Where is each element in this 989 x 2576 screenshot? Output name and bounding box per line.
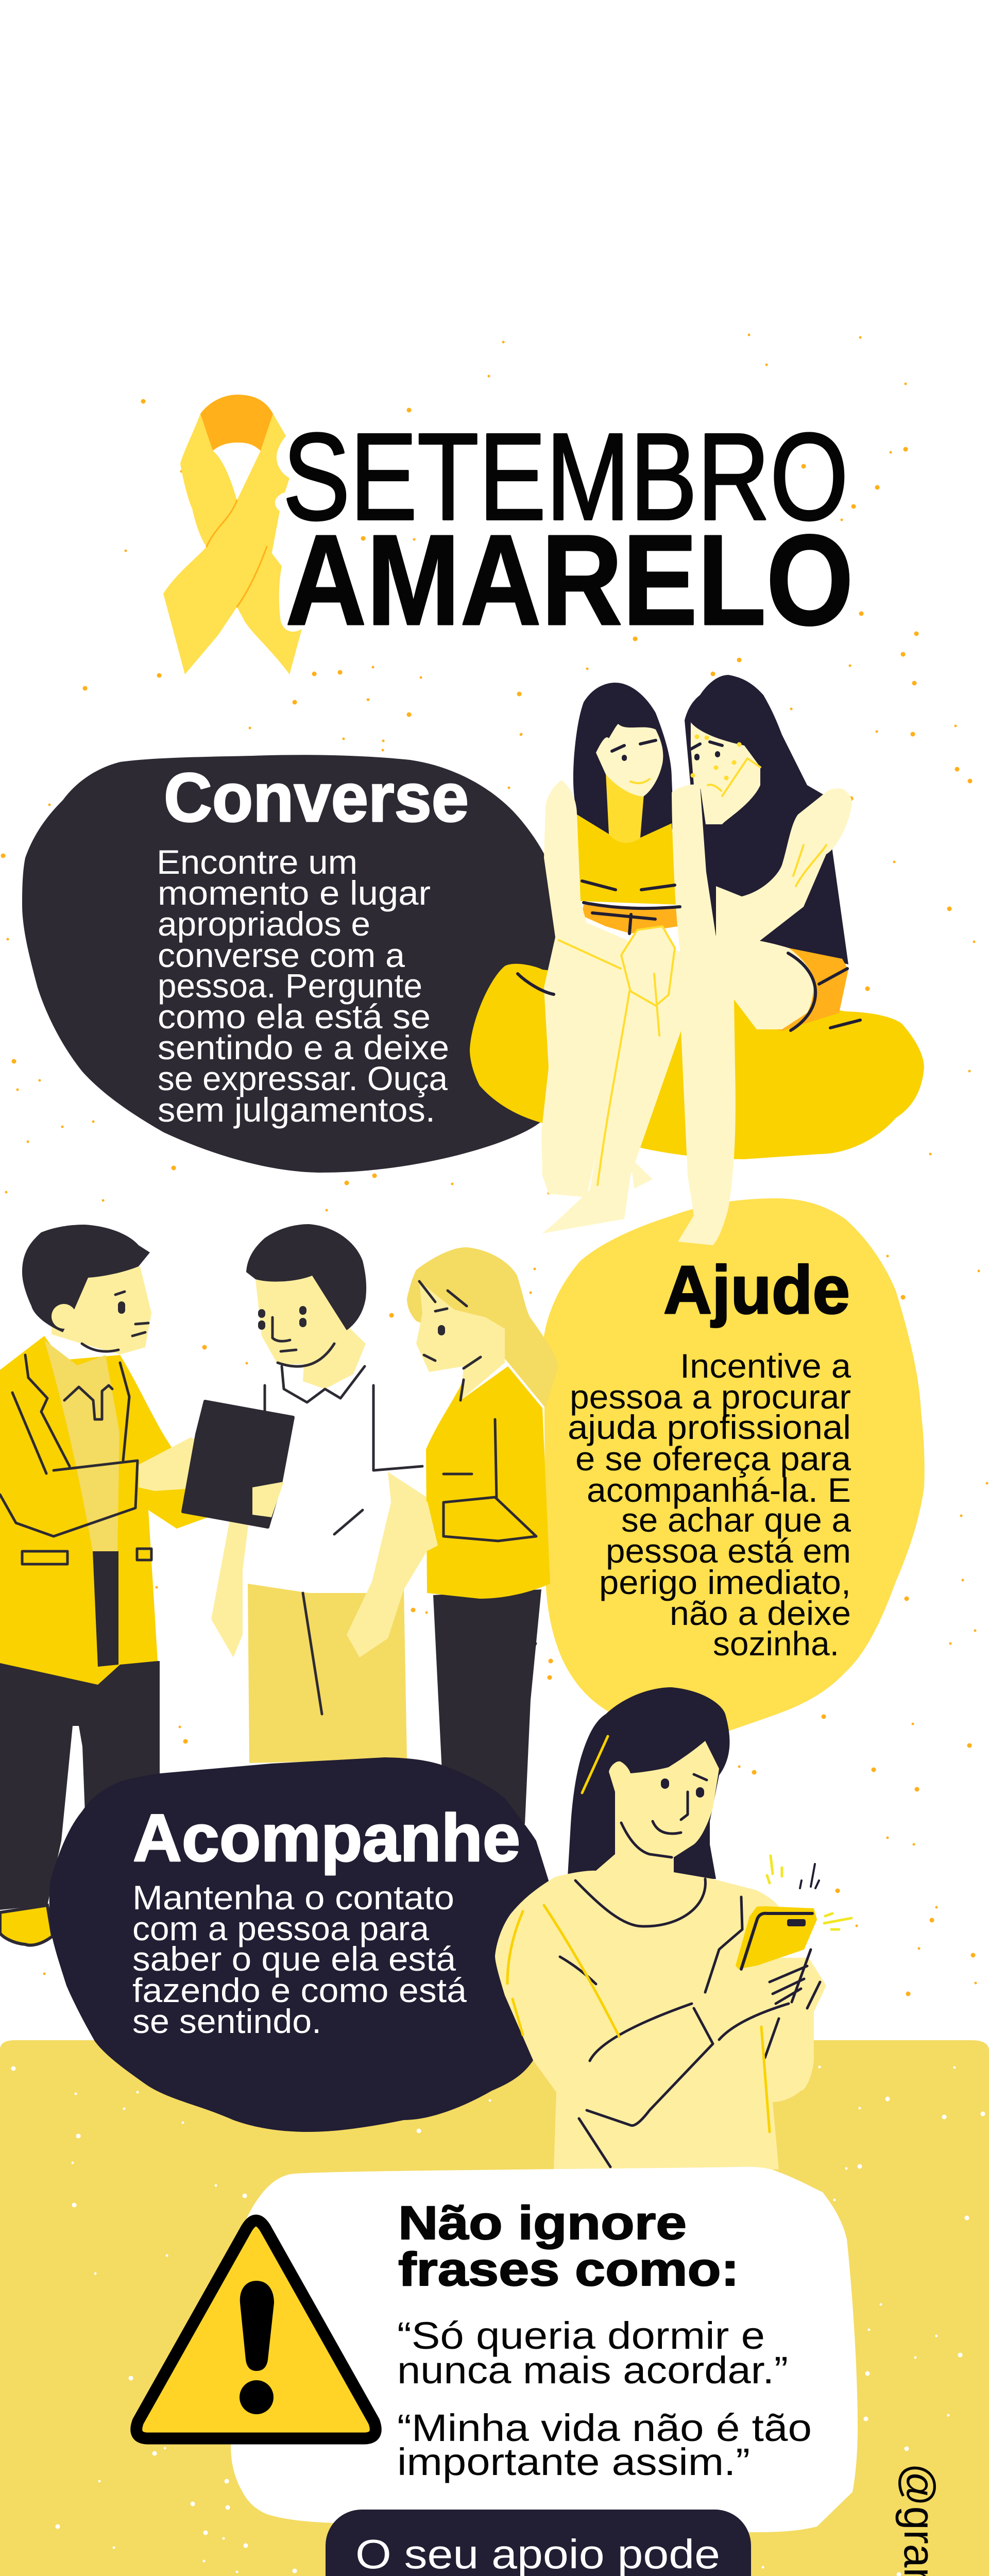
man one jacket	[0, 1336, 208, 1685]
text: converse body: Encontre um	[157, 843, 357, 881]
left woman legs	[541, 937, 681, 1233]
panel: converse	[22, 755, 561, 1173]
text: ajude body: e se ofereça para	[575, 1439, 851, 1478]
panel: warning box	[137, 2167, 858, 2532]
man two hair	[246, 1224, 366, 1330]
heading: warning	[398, 2197, 739, 2296]
text: converse body: pessoa. Pergunte	[158, 967, 422, 1005]
text: ajude body: Incentive a	[680, 1347, 851, 1385]
text: ajude body: sozinha.	[713, 1624, 839, 1663]
left woman neck	[606, 773, 644, 843]
man two face	[255, 1276, 366, 1389]
title: AMARELO	[285, 508, 854, 652]
white speckles on panel	[13, 2067, 983, 2576]
text: warning quotes: nunca mais acordar.”	[397, 2349, 788, 2392]
text: converse body	[157, 843, 449, 1129]
orange speckle background	[3, 335, 987, 1994]
text: warning quotes: “Só queria dormir e	[397, 2314, 765, 2357]
left woman top	[577, 815, 678, 905]
text: ajude body: não a deixe	[670, 1594, 851, 1632]
text: converse body: se expressar. Ouça	[158, 1059, 448, 1097]
right woman arms	[716, 788, 852, 943]
text: ajude body: acompanhá-la. E	[587, 1471, 851, 1509]
woman top	[426, 1366, 550, 1599]
body	[495, 1854, 826, 2170]
hand on tablet	[252, 1482, 284, 1517]
man one face	[52, 1266, 151, 1354]
tablet	[183, 1401, 293, 1527]
woman pants	[433, 1589, 541, 1824]
man one trousers	[0, 1661, 160, 1910]
heading: ajude: Ajude	[663, 1252, 850, 1328]
text: acompanhe body: com a pessoa para	[132, 1909, 429, 1947]
text: converse body: apropriados e	[158, 905, 370, 943]
title: SETEMBRO	[283, 408, 848, 546]
woman hair	[407, 1247, 558, 1408]
illustration: beanbag	[470, 964, 924, 1159]
man one hand	[139, 1437, 214, 1491]
man two trousers	[248, 1584, 407, 1763]
left woman hair	[573, 683, 674, 838]
man one trouser gap	[93, 1551, 118, 1667]
title	[283, 408, 854, 652]
left woman face	[596, 724, 663, 796]
heading: warning: Não ignore	[398, 2197, 687, 2249]
face	[596, 1741, 719, 1875]
left woman back foot	[630, 1158, 653, 1189]
outfit and face lines	[0, 1281, 536, 1714]
right woman leg	[678, 936, 814, 1245]
text: acompanhe body: fazendo e como está	[132, 1971, 467, 2009]
left woman hand	[621, 926, 675, 1006]
illustration: three people with tablet	[0, 1224, 558, 1945]
panel: acompanhe	[49, 1757, 556, 2132]
text: acompanhe body: saber o que ela está	[132, 1940, 456, 1978]
left woman shorts	[582, 905, 678, 934]
hand on arm	[391, 1495, 438, 1558]
text: converse body: sentindo e a deixe	[158, 1028, 449, 1066]
right woman hair	[685, 675, 848, 964]
heading: warning: frases como:	[398, 2243, 739, 2296]
man one shirt	[44, 1340, 120, 1551]
man one ear	[52, 1304, 76, 1329]
text: converse body: sem julgamentos.	[158, 1091, 435, 1129]
illustration: yellow blob ajude	[544, 1198, 925, 1752]
man two arms	[211, 1472, 429, 1657]
text: warning quotes: “Minha vida não é tão	[397, 2406, 812, 2449]
man one hair	[22, 1225, 150, 1332]
illustration: woman with phone	[495, 1687, 851, 2170]
text: warning quotes: importante assim.”	[397, 2441, 750, 2483]
panel: ajude text	[568, 1252, 851, 1663]
heading: acompanhe: Acompanhe	[133, 1800, 520, 1875]
text: warning quotes	[397, 2314, 812, 2483]
callout: support message	[326, 2510, 751, 2576]
text: converse body: momento e lugar	[158, 874, 431, 912]
phone	[736, 1906, 817, 1969]
icon: awareness ribbon	[163, 395, 302, 674]
woman face	[416, 1281, 505, 1400]
heading: converse: Converse	[164, 759, 469, 836]
text: ajude body: se achar que a	[621, 1501, 851, 1539]
text: acompanhe body: Mantenha o contato	[132, 1878, 454, 1917]
text: acompanhe body	[132, 1878, 467, 2040]
text: ajude body: ajuda profissional	[568, 1408, 851, 1446]
text: ajude body	[568, 1347, 851, 1663]
icon: warning triangle	[137, 2221, 376, 2438]
text: ajude body: pessoa está em	[606, 1532, 851, 1570]
face and clothing lines	[560, 1774, 820, 2167]
illustration: two women sitting	[518, 675, 860, 1245]
text: ajude body: pessoa a procurar	[570, 1378, 851, 1416]
hair	[568, 1687, 730, 1879]
yellow lower panel	[0, 2040, 989, 2576]
phone details	[741, 1913, 812, 1969]
text: ajude body: perigo imediato,	[599, 1563, 851, 1601]
text: converse body: converse com a	[158, 936, 405, 974]
left woman arm	[544, 780, 637, 966]
right woman face	[691, 722, 760, 800]
right woman shorts	[762, 948, 848, 1031]
callout: support message: O seu apoio pode	[355, 2531, 720, 2576]
man one shoe	[0, 1905, 53, 1945]
faces and outfit lines	[518, 737, 860, 1185]
text: converse body: como ela está se	[158, 997, 431, 1036]
text: acompanhe body: se sentindo.	[132, 2002, 321, 2040]
icon: phone sparks	[767, 1856, 851, 1929]
